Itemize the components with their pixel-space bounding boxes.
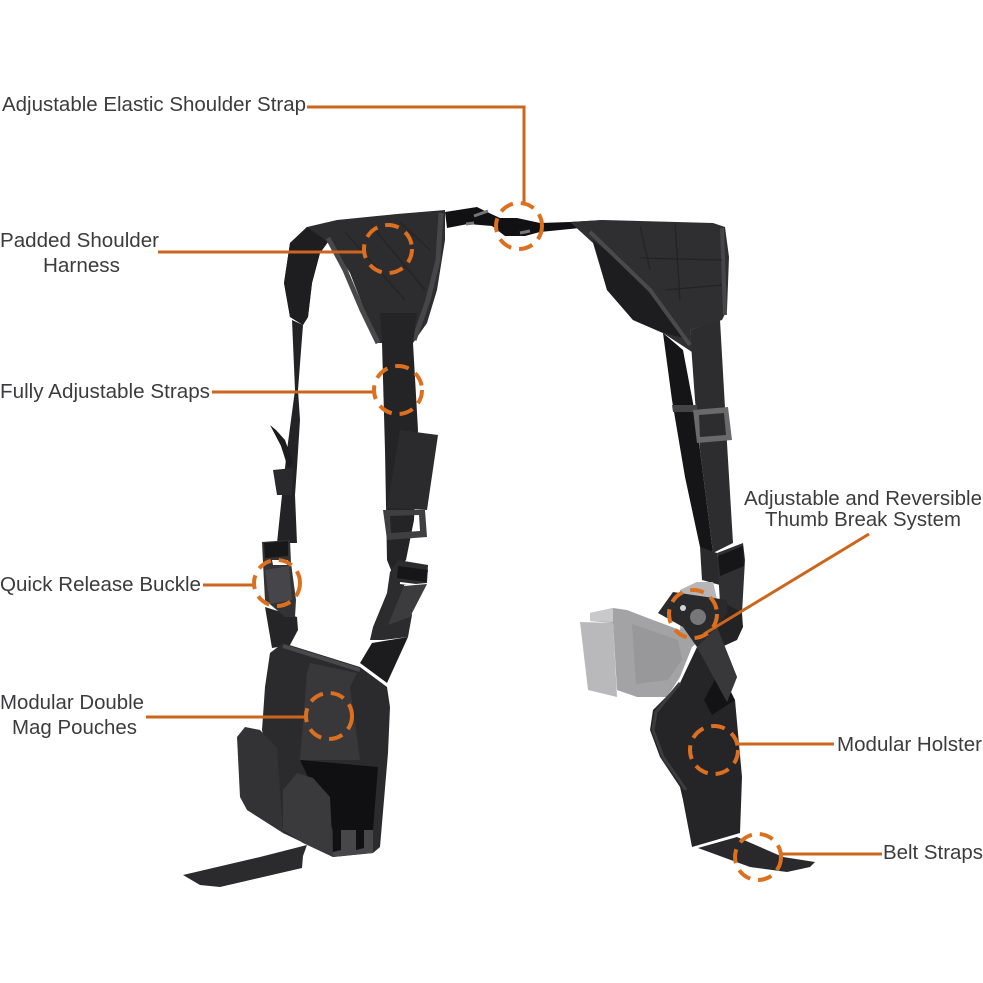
- label: belt straps: Belt Straps: [883, 842, 983, 864]
- pouch right flap: [283, 773, 333, 857]
- label: padded shoulder harness: Padded Shoulder: [0, 230, 159, 252]
- label: modular double mag pouches: Modular Double: [0, 692, 144, 714]
- left front strap to pouch: [360, 637, 408, 683]
- right strap slider: [693, 407, 732, 443]
- left strap tail: [387, 430, 438, 510]
- label: padded shoulder harness: Harness: [43, 255, 120, 277]
- right belt strap: [698, 837, 815, 872]
- right quick release buckle: [700, 543, 745, 613]
- left main strap: [380, 313, 418, 575]
- label: adjustable and reversible thumb break system: Thumb Break System: [765, 509, 961, 531]
- right shoulder harness pad: [570, 220, 729, 352]
- label: padded shoulder harness: [0, 230, 159, 277]
- thumb break strap with snap: [658, 592, 737, 702]
- left bottom belt strap: [183, 845, 307, 887]
- left front quick release buckle: [370, 560, 428, 640]
- label: modular double mag pouches: Mag Pouches: [12, 717, 137, 739]
- label: modular double mag pouches: [0, 692, 144, 739]
- holster strap behind: [715, 600, 743, 650]
- label: adjustable and reversible thumb break system: [744, 488, 982, 531]
- left rear quick release buckle: [262, 540, 298, 648]
- label: adjustable elastic shoulder strap: Adjustable Elastic Shoulder Strap: [2, 94, 306, 116]
- label: adjustable and reversible thumb break system: Adjustable and Reversible: [744, 488, 982, 510]
- right main straps: [663, 320, 733, 553]
- modular holster: [650, 647, 742, 847]
- pistol: [580, 582, 717, 697]
- left strap slider buckle: [383, 510, 427, 540]
- label: fully adjustable straps: Fully Adjustable Straps: [0, 381, 210, 403]
- left thin strap slider: [273, 468, 293, 495]
- pouch left flap: [237, 727, 283, 833]
- center adjustable buckle: [445, 207, 603, 236]
- left thin strap: [270, 320, 303, 543]
- label: modular holster: Modular Holster: [837, 734, 982, 756]
- left shoulder harness pad: [284, 210, 445, 343]
- magazine pouch panel: [262, 643, 390, 857]
- label: quick release buckle: Quick Release Buckle: [0, 574, 201, 596]
- orange leader lines: [146, 107, 882, 854]
- dashed callout circles: [254, 203, 781, 880]
